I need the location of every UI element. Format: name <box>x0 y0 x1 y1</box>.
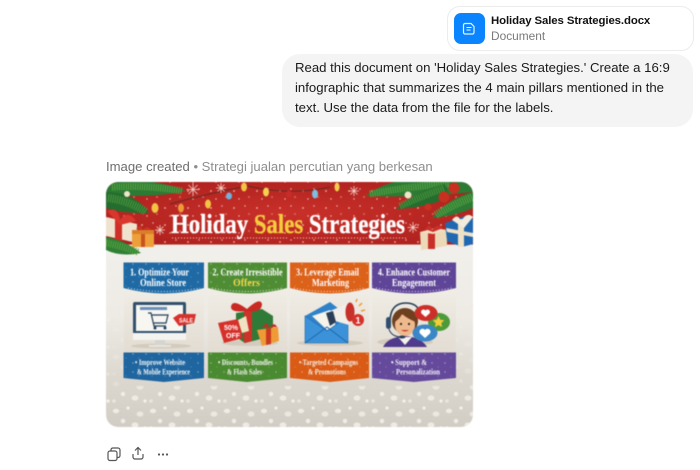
left gift boxes <box>106 210 154 247</box>
file type: Document <box>491 29 545 43</box>
pillar 4 heading <box>372 262 456 294</box>
pillar 2 ribbon: & Flash Sales <box>227 366 262 376</box>
panel: 4 enhance customer engagement <box>372 262 456 382</box>
icon: gift boxes with 50% off tag: 50% <box>224 325 239 332</box>
action icons row <box>107 446 168 462</box>
snow texture <box>106 386 473 427</box>
pillar 2 heading: 2. Create Irresistible <box>212 268 283 278</box>
banner <box>106 182 473 245</box>
panel: 1 optimize your online store <box>124 262 204 382</box>
pillar 1 heading: Online Store <box>140 278 186 289</box>
pillar 1 ribbon: • Improve Website <box>135 357 185 367</box>
pillar 1 heading: 1. Optimize Your <box>130 268 189 278</box>
image caption: Image created • Strategi jualan percutian yang berkesan <box>106 159 433 174</box>
file name: Holiday Sales Strategies.docx <box>491 15 650 27</box>
string lights <box>152 182 340 213</box>
pillar 3 ribbon <box>290 352 369 382</box>
icon: gift boxes with 50% off tag <box>218 301 279 346</box>
pillar 1 heading <box>124 262 204 294</box>
pillar 2 ribbon <box>208 352 287 382</box>
paper background <box>106 246 474 428</box>
left pine branches <box>106 181 186 254</box>
icon: copy <box>108 448 120 460</box>
infographic image <box>105 181 474 428</box>
pillar 3 heading <box>290 262 369 294</box>
user message bubble <box>282 54 693 127</box>
panel: 2 create irresistible offers <box>208 262 287 382</box>
pillar 4 heading: Engagement <box>392 278 437 289</box>
title: Holiday Sales Strategies <box>171 209 405 239</box>
icon: gift boxes with 50% off tag: OFF <box>226 333 241 340</box>
icon: support agent with chat bubbles <box>377 303 450 347</box>
pillar 4 heading: 4. Enhance Customer <box>378 268 450 278</box>
sparkle line under title <box>172 237 408 239</box>
pillar 4 ribbon: Personalization <box>396 366 440 376</box>
pillar 3 ribbon: • Targeted Campaigns <box>299 357 359 367</box>
pillar 2 heading: Offers <box>233 278 260 289</box>
pillar 2 heading <box>208 262 287 294</box>
message text: Read this document on 'Holiday Sales Strategies.' Create a 16:9 <box>295 60 670 75</box>
message text: text. Use the data from the file for the labels. <box>295 100 553 115</box>
snowflakes <box>155 183 418 235</box>
icon: envelope with megaphone: 1 <box>355 316 361 326</box>
pillar 3 heading: Marketing <box>312 278 349 289</box>
message text: infographic that summarizes the 4 main pillars mentioned in the <box>295 80 664 95</box>
right gift boxes <box>420 215 473 250</box>
icon: share <box>133 448 143 459</box>
pillar 3 heading: 3. Leverage Email <box>296 268 359 278</box>
icon: more <box>158 453 168 456</box>
pillar 4 ribbon <box>372 352 456 382</box>
right pine branches <box>366 182 473 218</box>
pillar 3 ribbon: & Promotions <box>308 366 347 376</box>
icon: monitor with shopping cart: SALE <box>179 318 194 324</box>
file attachment card <box>447 6 694 51</box>
pillar 4 ribbon: • Support & <box>391 357 427 367</box>
icon: document <box>454 13 485 44</box>
pillar 1 ribbon: & Mobile Experience <box>137 366 190 376</box>
pillar 2 ribbon: • Discounts, Bundles <box>218 357 274 367</box>
message text <box>295 60 670 115</box>
panel: 3 leverage email marketing <box>290 262 369 382</box>
pillar 1 ribbon <box>124 352 204 382</box>
